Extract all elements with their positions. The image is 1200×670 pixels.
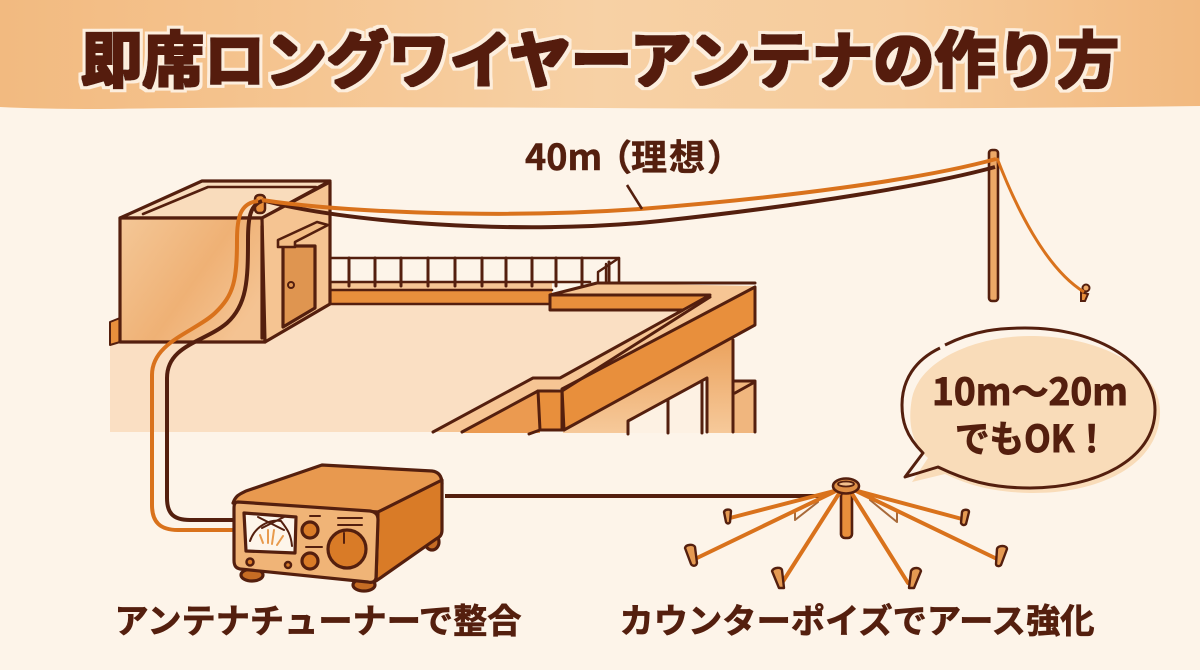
- hub: [833, 478, 859, 494]
- tie point: [255, 195, 265, 213]
- underside wires: [795, 500, 897, 522]
- length leader: [627, 185, 642, 209]
- building: [120, 181, 330, 342]
- guy wire: [997, 158, 1084, 292]
- length label: ）: [707, 129, 743, 181]
- meter: [244, 513, 296, 553]
- coax orange: [152, 201, 258, 530]
- cabinet top: [233, 465, 442, 512]
- pole: [989, 150, 998, 301]
- length label: （: [596, 129, 632, 181]
- main dial: [328, 530, 366, 568]
- antenna wire: dark: [262, 167, 995, 227]
- length label: 40m: [525, 129, 602, 181]
- length label: 想: [669, 129, 705, 181]
- counterpoise: [685, 478, 1007, 588]
- cabinet front: [234, 502, 378, 582]
- bubble fill: [910, 336, 1160, 493]
- centre post: [841, 492, 852, 538]
- bubble text: 10m〜20m: [932, 362, 1128, 416]
- small controls: [302, 522, 318, 538]
- speech bubble: [902, 328, 1160, 493]
- rooftop scene: [110, 181, 755, 434]
- roof floor: [110, 304, 683, 432]
- title band: [0, 0, 1200, 109]
- cabinet side: [376, 480, 442, 581]
- length label: 理: [631, 129, 667, 181]
- antenna tuner: [233, 465, 442, 591]
- feet: [241, 569, 263, 581]
- stakes: [685, 510, 1007, 588]
- distant stake: [1081, 284, 1090, 301]
- bubble text line 2: でもOK！: [955, 409, 1109, 463]
- parapet: [433, 283, 755, 434]
- radials: [697, 490, 995, 583]
- railing: [330, 258, 619, 304]
- bubble outline: [902, 328, 1155, 488]
- coax dark: [167, 201, 820, 520]
- left ledge: [110, 318, 120, 345]
- title: 即席ロングワイヤーアンテナの作り方: [81, 11, 1119, 100]
- caption: tuner: アンテナチューナーで整合: [114, 594, 522, 643]
- caption: counterpoise: カウンターポイズでアース強化: [620, 594, 1094, 643]
- antenna wire: orange: [262, 159, 996, 214]
